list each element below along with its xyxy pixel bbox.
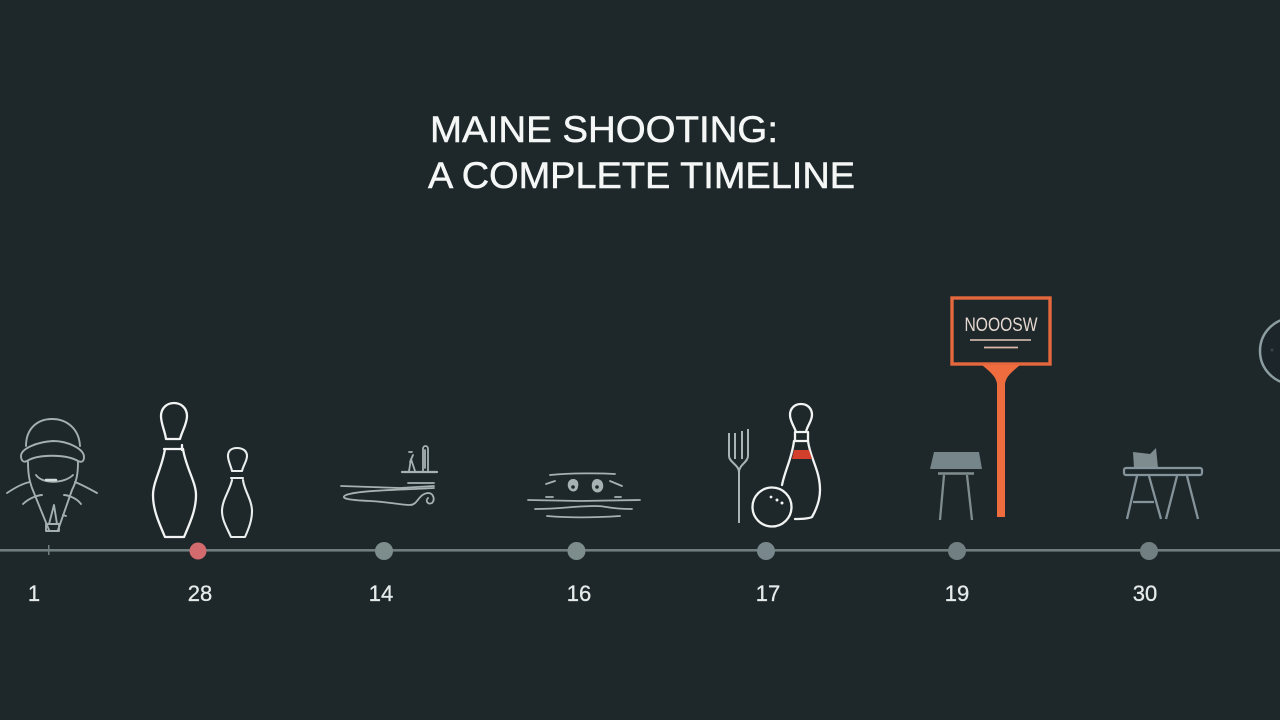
icon: table and chairs [1124, 448, 1202, 519]
timeline date labels: 19 [945, 581, 969, 606]
icon: person with cap [7, 419, 97, 531]
sign lettering: NOOOSW [964, 315, 1038, 336]
icon: lane scene [341, 446, 437, 505]
icon: bowling pin and ball [752, 404, 820, 526]
icon: bar stool [930, 452, 982, 520]
timeline date labels: 28 [188, 581, 212, 606]
icon: small bowling pin [222, 448, 252, 537]
timeline date labels: 17 [756, 581, 780, 606]
icon: cropped circle at right edge [1260, 318, 1280, 384]
icon: fork [729, 429, 748, 523]
title: MAINE SHOOTING: [430, 108, 778, 150]
title: A COMPLETE TIMELINE [428, 154, 855, 196]
icon: large bowling pin [153, 403, 196, 537]
timeline date labels: 16 [567, 581, 591, 606]
icon: orange sign [952, 298, 1050, 517]
timeline axis [0, 549, 1280, 552]
timeline date labels: 1 [28, 581, 40, 606]
bowling ball [752, 488, 792, 526]
timeline markers [48, 542, 1158, 560]
red pin stripe [792, 450, 812, 459]
title [428, 108, 855, 196]
timeline date labels: 30 [1133, 581, 1157, 606]
timeline date labels [28, 581, 1157, 606]
timeline date labels: 14 [369, 581, 393, 606]
icon: pin deck [528, 473, 640, 518]
